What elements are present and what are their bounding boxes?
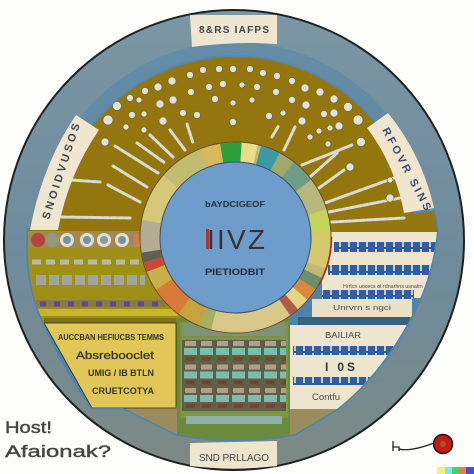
- panel: central table: [176, 318, 290, 448]
- yellow box text: CRUETCOTYA: [92, 386, 154, 396]
- centre heading: bAYDCIGEOF: [205, 200, 265, 209]
- panel: lower-left olive rows: [20, 231, 185, 326]
- table header: [183, 323, 285, 336]
- dark band: [298, 317, 410, 325]
- dot markers: [101, 66, 394, 202]
- band 2: [328, 265, 432, 275]
- row: icon strip: [28, 231, 143, 248]
- band 1: [334, 242, 438, 252]
- cream box large: [290, 325, 410, 409]
- right panel text: Hrrtcn uocecs ot rdnarhns usnatrn: [343, 284, 423, 290]
- cream box small: [312, 299, 412, 317]
- bottom-left caption: Afaionak?: [5, 442, 111, 461]
- mosaic ring: [140, 142, 332, 334]
- right curved label: RFOVR SINS: [379, 126, 433, 213]
- right panel text: BAILIAR: [325, 330, 361, 340]
- panel: gold sector with dots: [20, 50, 445, 448]
- central blue circle: [160, 162, 311, 313]
- yellow box text: UMIG / IB BTLN: [88, 368, 154, 378]
- row: short marks: [32, 260, 145, 264]
- table mosaic: [182, 340, 286, 411]
- right panel text: Contfu: [312, 392, 340, 402]
- panel: tan lower block left: [124, 406, 177, 434]
- yellow box text: Absrebooclet: [76, 350, 154, 362]
- yellow box text: [58, 333, 165, 396]
- yellow box text: AUCCBAN HEFIUCBS TEMMS: [58, 333, 165, 342]
- right panel text: Unrvrn s ngci: [333, 303, 391, 312]
- row: coloured strip: [36, 300, 178, 324]
- centre caption: PIETIODBIT: [205, 267, 265, 278]
- right panel text: [312, 284, 423, 402]
- band 5: [293, 377, 373, 385]
- bottom-left caption: [5, 418, 111, 461]
- left curved label: SNOIDVUSOS: [40, 122, 83, 221]
- panel: tan lower block right: [290, 408, 338, 435]
- right curved label: [367, 113, 434, 213]
- bottom label: SND PRLLAGO: [199, 453, 269, 464]
- band 4: [293, 346, 395, 355]
- panel: yellow info box: [44, 323, 176, 408]
- row: dense marks: [36, 275, 145, 285]
- top label: 8&RS IAFPS: [199, 25, 269, 36]
- right panel text: I 0S: [325, 360, 355, 374]
- table footer: [186, 416, 282, 424]
- band 3: [322, 290, 414, 299]
- panel: right cream bands: [290, 232, 442, 409]
- centre big label: IIVZ: [207, 224, 265, 255]
- bottom label: [190, 441, 277, 468]
- streak markers: [62, 124, 404, 222]
- icon: signature with red dot: [393, 434, 452, 454]
- top label: [190, 15, 277, 47]
- bottom-left caption: Host!: [5, 418, 52, 437]
- left curved label: [30, 115, 99, 230]
- colour strip: [437, 467, 474, 474]
